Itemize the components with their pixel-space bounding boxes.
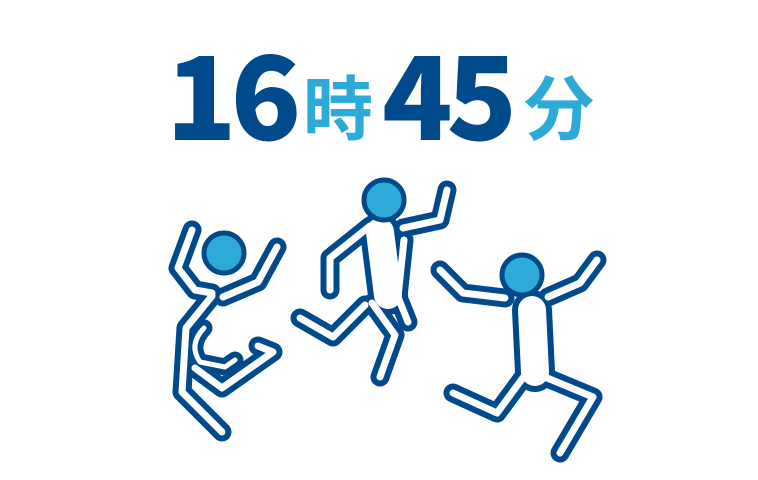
figure: left person xyxy=(178,230,277,432)
minute kanji: 分 xyxy=(524,54,594,155)
figure: middle person xyxy=(300,180,447,377)
hour kanji: 時 xyxy=(303,54,373,155)
minute digits: 45 xyxy=(382,6,511,174)
figure: right person xyxy=(440,255,597,453)
hour digits: 16 xyxy=(166,6,295,174)
title: time 16時45分 xyxy=(166,6,594,174)
